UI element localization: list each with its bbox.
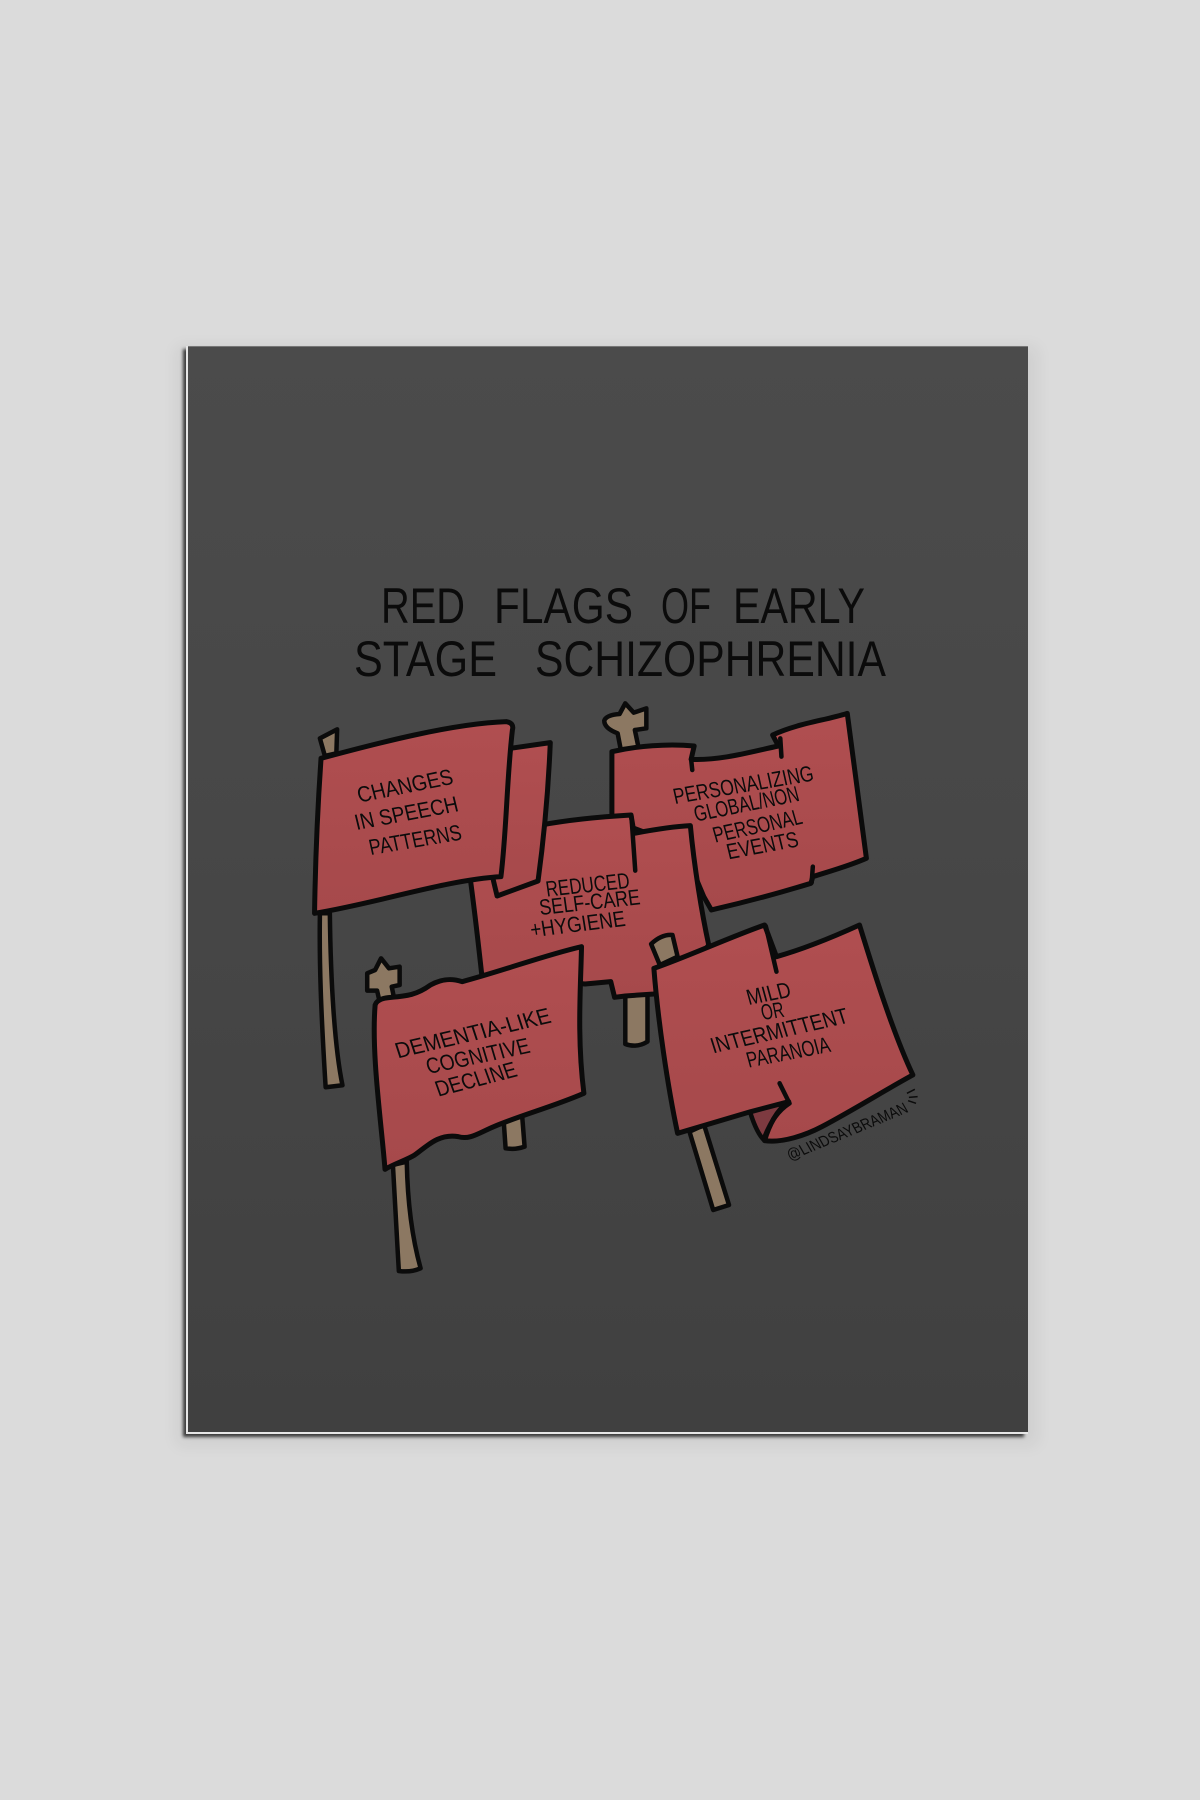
fold marks — [765, 926, 790, 1137]
title: SCHIZOPHRENIA — [535, 631, 887, 687]
back fold of flag — [493, 743, 550, 896]
flag text — [529, 869, 642, 943]
flag text: DECLINE — [432, 1058, 520, 1102]
pole stubs — [393, 1117, 525, 1271]
signature ticks — [907, 1089, 918, 1103]
flag cloth — [654, 925, 913, 1141]
flag text: EVENTS — [724, 828, 801, 865]
fold marks — [691, 738, 813, 883]
flag text: +HYGIENE — [529, 907, 627, 943]
flag text: INTERMITTENT — [707, 1004, 852, 1059]
flag cloth — [612, 713, 866, 910]
title: EARLY — [733, 578, 865, 634]
flag text: PERSONAL — [710, 805, 805, 848]
card shadow — [183, 349, 1024, 1437]
pole — [320, 729, 342, 1087]
title — [354, 578, 887, 687]
flag: dementia-like cognitive decline — [367, 947, 584, 1271]
flag text: PARANOIA — [744, 1033, 834, 1073]
flag text: IN SPEECH — [352, 793, 461, 835]
flag text — [707, 978, 852, 1073]
flag cloth — [374, 947, 584, 1169]
pole — [651, 935, 729, 1210]
flag text — [352, 765, 464, 860]
flag text: PATTERNS — [367, 821, 464, 860]
flag: changes in speech patterns — [315, 722, 550, 1087]
title: STAGE — [354, 631, 497, 687]
flag text: DEMENTIA-LIKE — [392, 1004, 554, 1064]
flag text: OR — [759, 998, 786, 1025]
card soft shadow — [176, 346, 1038, 1446]
flag cloth — [470, 815, 709, 997]
flag text: PERSONALIZING — [671, 762, 816, 809]
poster card — [188, 346, 1028, 1432]
inner fold — [750, 1102, 789, 1141]
flag text: COGNITIVE — [423, 1034, 533, 1079]
flag: mild or intermittent paranoia — [651, 925, 918, 1210]
flag cloth — [315, 722, 513, 913]
fold mark — [631, 816, 635, 871]
flag text: SELF-CARE — [538, 886, 642, 921]
flag text: CHANGES — [355, 765, 456, 808]
signature: @LINDSAYBRAMAN — [783, 1099, 911, 1164]
icon: pole star top — [604, 703, 646, 749]
title: RED — [381, 578, 465, 634]
flag text: MILD — [744, 978, 794, 1010]
flag: personalizing global events — [604, 703, 866, 910]
flag: reduced self-care — [470, 815, 709, 1046]
flag text — [392, 1004, 554, 1102]
title: FLAGS — [494, 578, 633, 634]
pole stub — [625, 993, 647, 1046]
flag text — [671, 762, 816, 865]
title: OF — [661, 578, 711, 634]
flag text: GLOBAL/NON — [691, 783, 802, 827]
flag text: REDUCED — [544, 869, 631, 902]
card edge — [186, 346, 1028, 1434]
icon: pole star top — [367, 958, 400, 999]
